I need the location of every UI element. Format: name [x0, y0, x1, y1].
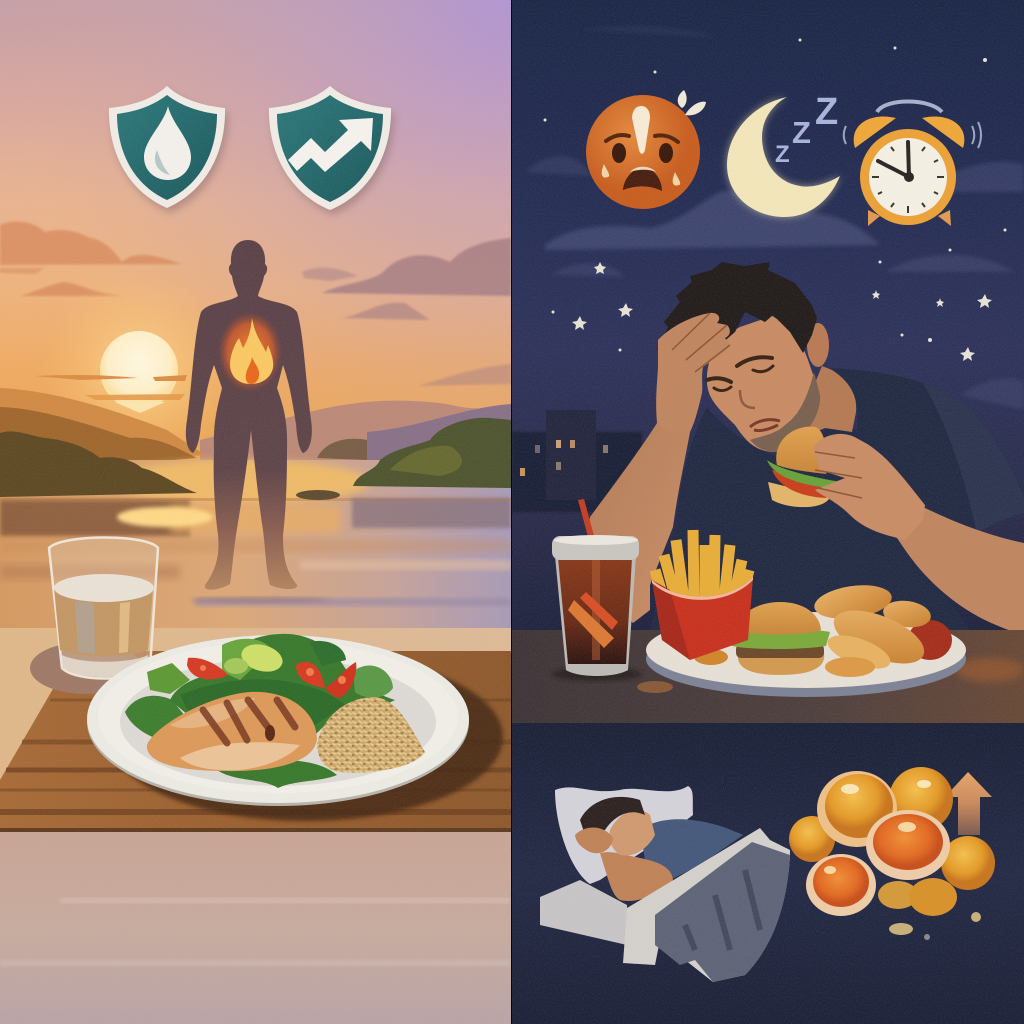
- tomatoes: [187, 658, 356, 698]
- distant hills: [0, 388, 511, 460]
- clouds right: [302, 238, 511, 386]
- hair: [657, 262, 817, 353]
- lake water: [0, 460, 511, 630]
- crescent moon with zzz: Z: [775, 141, 790, 168]
- grey blanket: [655, 842, 790, 982]
- alarm clock: [844, 102, 981, 226]
- fried pieces: [694, 581, 952, 677]
- face: [609, 810, 655, 856]
- panel: healthy sunset side: [0, 0, 511, 1024]
- tired man eating burger: [589, 262, 1024, 635]
- lower dark panel: [512, 723, 1024, 1024]
- sad face emoji: [586, 90, 706, 209]
- night clouds: [525, 26, 1024, 410]
- dark table surface: [512, 630, 1024, 723]
- glass of water with coaster: [30, 538, 158, 694]
- soda cup: [552, 499, 642, 681]
- sleeping person in bed: [540, 786, 790, 982]
- healthy meal plate: [87, 634, 469, 806]
- night city buildings: [512, 410, 642, 512]
- pillow: [555, 786, 693, 884]
- shirt: [640, 819, 743, 880]
- crescent moon with zzz: Z: [792, 115, 811, 150]
- stars: [544, 38, 1006, 361]
- panel: unhealthy night side: [512, 0, 1024, 1024]
- salad greens: [125, 634, 395, 740]
- lower greens: [217, 760, 337, 788]
- mattress: [540, 880, 627, 945]
- eyes and brow: [707, 357, 772, 382]
- brown rice: [317, 697, 425, 773]
- plated burger: [727, 602, 830, 675]
- crescent moon with zzz: [727, 91, 840, 217]
- table surface: [0, 628, 511, 1024]
- hand holding burger: [813, 434, 925, 540]
- hand on head: [656, 313, 730, 434]
- french fries: [652, 530, 753, 660]
- white sheet: [623, 828, 790, 982]
- sunset sky: [0, 0, 511, 490]
- hand under head: [575, 827, 613, 853]
- beard shadow: [750, 372, 820, 452]
- night sky: [512, 0, 1024, 630]
- wooden placemat: [0, 651, 511, 832]
- sun: [36, 310, 196, 434]
- ear: [807, 323, 829, 367]
- shield: water drop: [109, 86, 228, 213]
- forested shores: [0, 418, 511, 500]
- clouds left: [0, 221, 182, 296]
- burger held in hand: [767, 427, 842, 507]
- face: [707, 316, 820, 452]
- hair: [580, 797, 645, 835]
- right arm: [895, 507, 1024, 635]
- neck: [810, 366, 856, 432]
- fat cells with up arrow: [789, 767, 995, 940]
- body silhouette with flame: [186, 240, 312, 590]
- crescent moon with zzz: Z: [815, 91, 838, 133]
- fast food plate: [646, 581, 966, 697]
- water reflection of body: [190, 597, 330, 603]
- arm: [600, 852, 673, 901]
- grilled chicken: [147, 692, 317, 771]
- left arm: [589, 423, 690, 623]
- t-shirt: [678, 368, 972, 516]
- shield: rising arrow: [269, 86, 394, 215]
